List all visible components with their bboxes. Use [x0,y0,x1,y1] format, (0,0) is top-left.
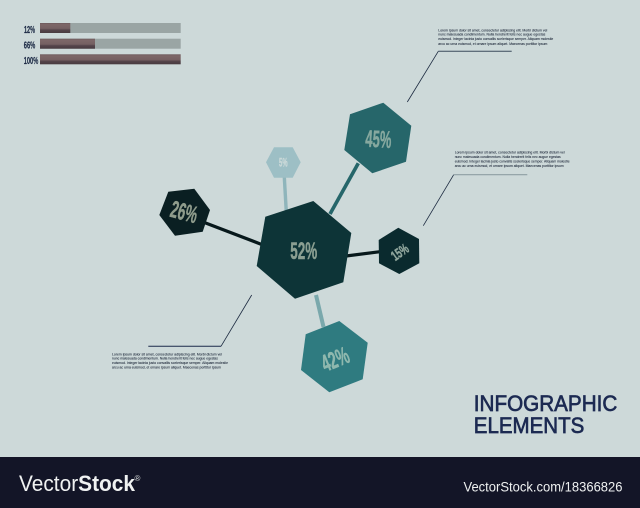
text block: middle right: nunc malesuada condimentum. Nulla hendrerit felis nec augue egestas [455,155,561,159]
bar: 100%: 100% [24,55,39,67]
text block: bottom left: euismod. Integer lacinia justo convallis scelerisque semper. Aliquam molestie [112,361,228,365]
title: ELEMENTS [474,413,584,438]
hexagon: 15%: 15% [388,240,412,264]
hexagon: 5% [266,147,301,178]
text block: top right: euismod. Integer lacinia justo convallis scelerisque semper. Aliquam molestie [438,37,553,41]
hexagon: 45% [344,103,411,173]
bar: 12% [24,23,181,36]
panel: progress bars [24,23,181,67]
hexagon: 26% [159,189,210,236]
text block: middle right: euismod. Integer lacinia justo convallis scelerisque semper. Aliquam molestie [455,159,570,163]
registered mark: ® [134,474,140,483]
leader line: top right [407,51,512,102]
hexagon: 15% [379,228,419,274]
footer id: VectorStock.com/18366826 [464,480,622,494]
text block: bottom left [112,352,228,370]
hexagon: 52%: 52% [290,238,317,265]
hexagon: 52% [257,201,351,299]
text block: middle right [455,151,570,168]
connector: 45% [330,163,358,214]
text block: top right: nunc malesuada condimentum. Nulla hendrerit felis nec augue egestas [438,33,545,37]
hexagon: 45%: 45% [365,126,392,154]
text block: top right: arcu ac urna euismod, et ornare ipsum aliquet. Maecenas porttitor ipsum [438,42,547,46]
text block: top right [438,28,553,46]
bar: 100% [24,54,181,67]
leader line: middle right [423,175,527,226]
bar: 66%: 66% [24,40,36,52]
text block: bottom left: Lorem ipsum dolor sit amet, consectetur adipiscing elit. Morbi dictum vel [112,352,222,356]
leader line: bottom left [148,295,252,346]
bar: 12%: 12% [24,24,35,36]
hexagon: 42% [301,321,368,392]
text block: bottom left: nunc malesuada condimentum. Nulla hendrerit felis nec augue egestas [112,357,218,361]
hexagon: 5%: 5% [279,156,288,170]
connector: 15% [346,252,380,256]
bar: 66% [24,39,181,52]
connector: 42% [316,295,324,327]
connector: 5% [284,177,286,212]
text block: top right: Lorem ipsum dolor sit amet, consectetur adipiscing elit. Morbi dictum vel [438,28,547,32]
hexagon: 26%: 26% [168,196,201,229]
footer band [0,457,640,508]
title [474,391,617,438]
connector: 26% [205,223,261,244]
logo: VectorStock: VectorStock [19,471,136,496]
text block: bottom left: arcu ac urna euismod, et ornare ipsum aliquet. Maecenas porttitor ipsum [112,366,221,370]
text block: middle right: arcu ac urna euismod, et ornare ipsum aliquet. Maecenas porttitor ipsum [455,164,564,168]
title: INFOGRAPHIC [474,391,617,416]
text block: middle right: Lorem ipsum dolor sit amet, consectetur adipiscing elit. Morbi dictum vel [455,151,565,155]
hexagon: 42%: 42% [317,342,353,378]
